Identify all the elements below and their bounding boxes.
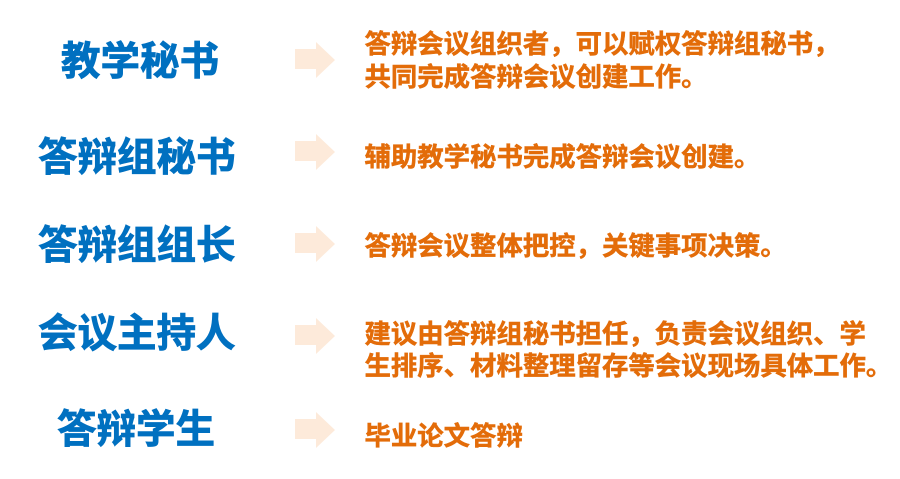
description 1 <box>364 29 840 92</box>
description 2: 辅助教学秘书完成答辩会议创建。 <box>364 142 760 172</box>
arrow 3 <box>295 226 335 262</box>
arrow 1 <box>295 42 335 78</box>
heading: 教学秘书: 教学秘书 <box>61 40 219 84</box>
heading: 会议主持人: 会议主持人 <box>38 312 236 356</box>
arrow 5 <box>295 412 335 448</box>
description 4 <box>364 318 892 381</box>
heading: 答辩组组长: 答辩组组长 <box>38 224 236 268</box>
heading: 答辩学生: 答辩学生 <box>57 408 215 452</box>
description 3: 答辩会议整体把控，关键事项决策。 <box>364 231 787 261</box>
description 1: 共同完成答辩会议创建工作。 <box>364 62 708 92</box>
description 1: 答辩会议组织者，可以赋权答辩组秘书， <box>364 29 840 59</box>
heading: 答辩组秘书: 答辩组秘书 <box>38 136 236 180</box>
description 4: 生排序、材料整理留存等会议现场具体工作。 <box>364 351 892 381</box>
arrow 4 <box>295 318 335 354</box>
arrow 2 <box>295 134 335 170</box>
description 5: 毕业论文答辩 <box>364 421 523 451</box>
description 4: 建议由答辩组秘书担任，负责会议组织、学 <box>364 318 866 348</box>
